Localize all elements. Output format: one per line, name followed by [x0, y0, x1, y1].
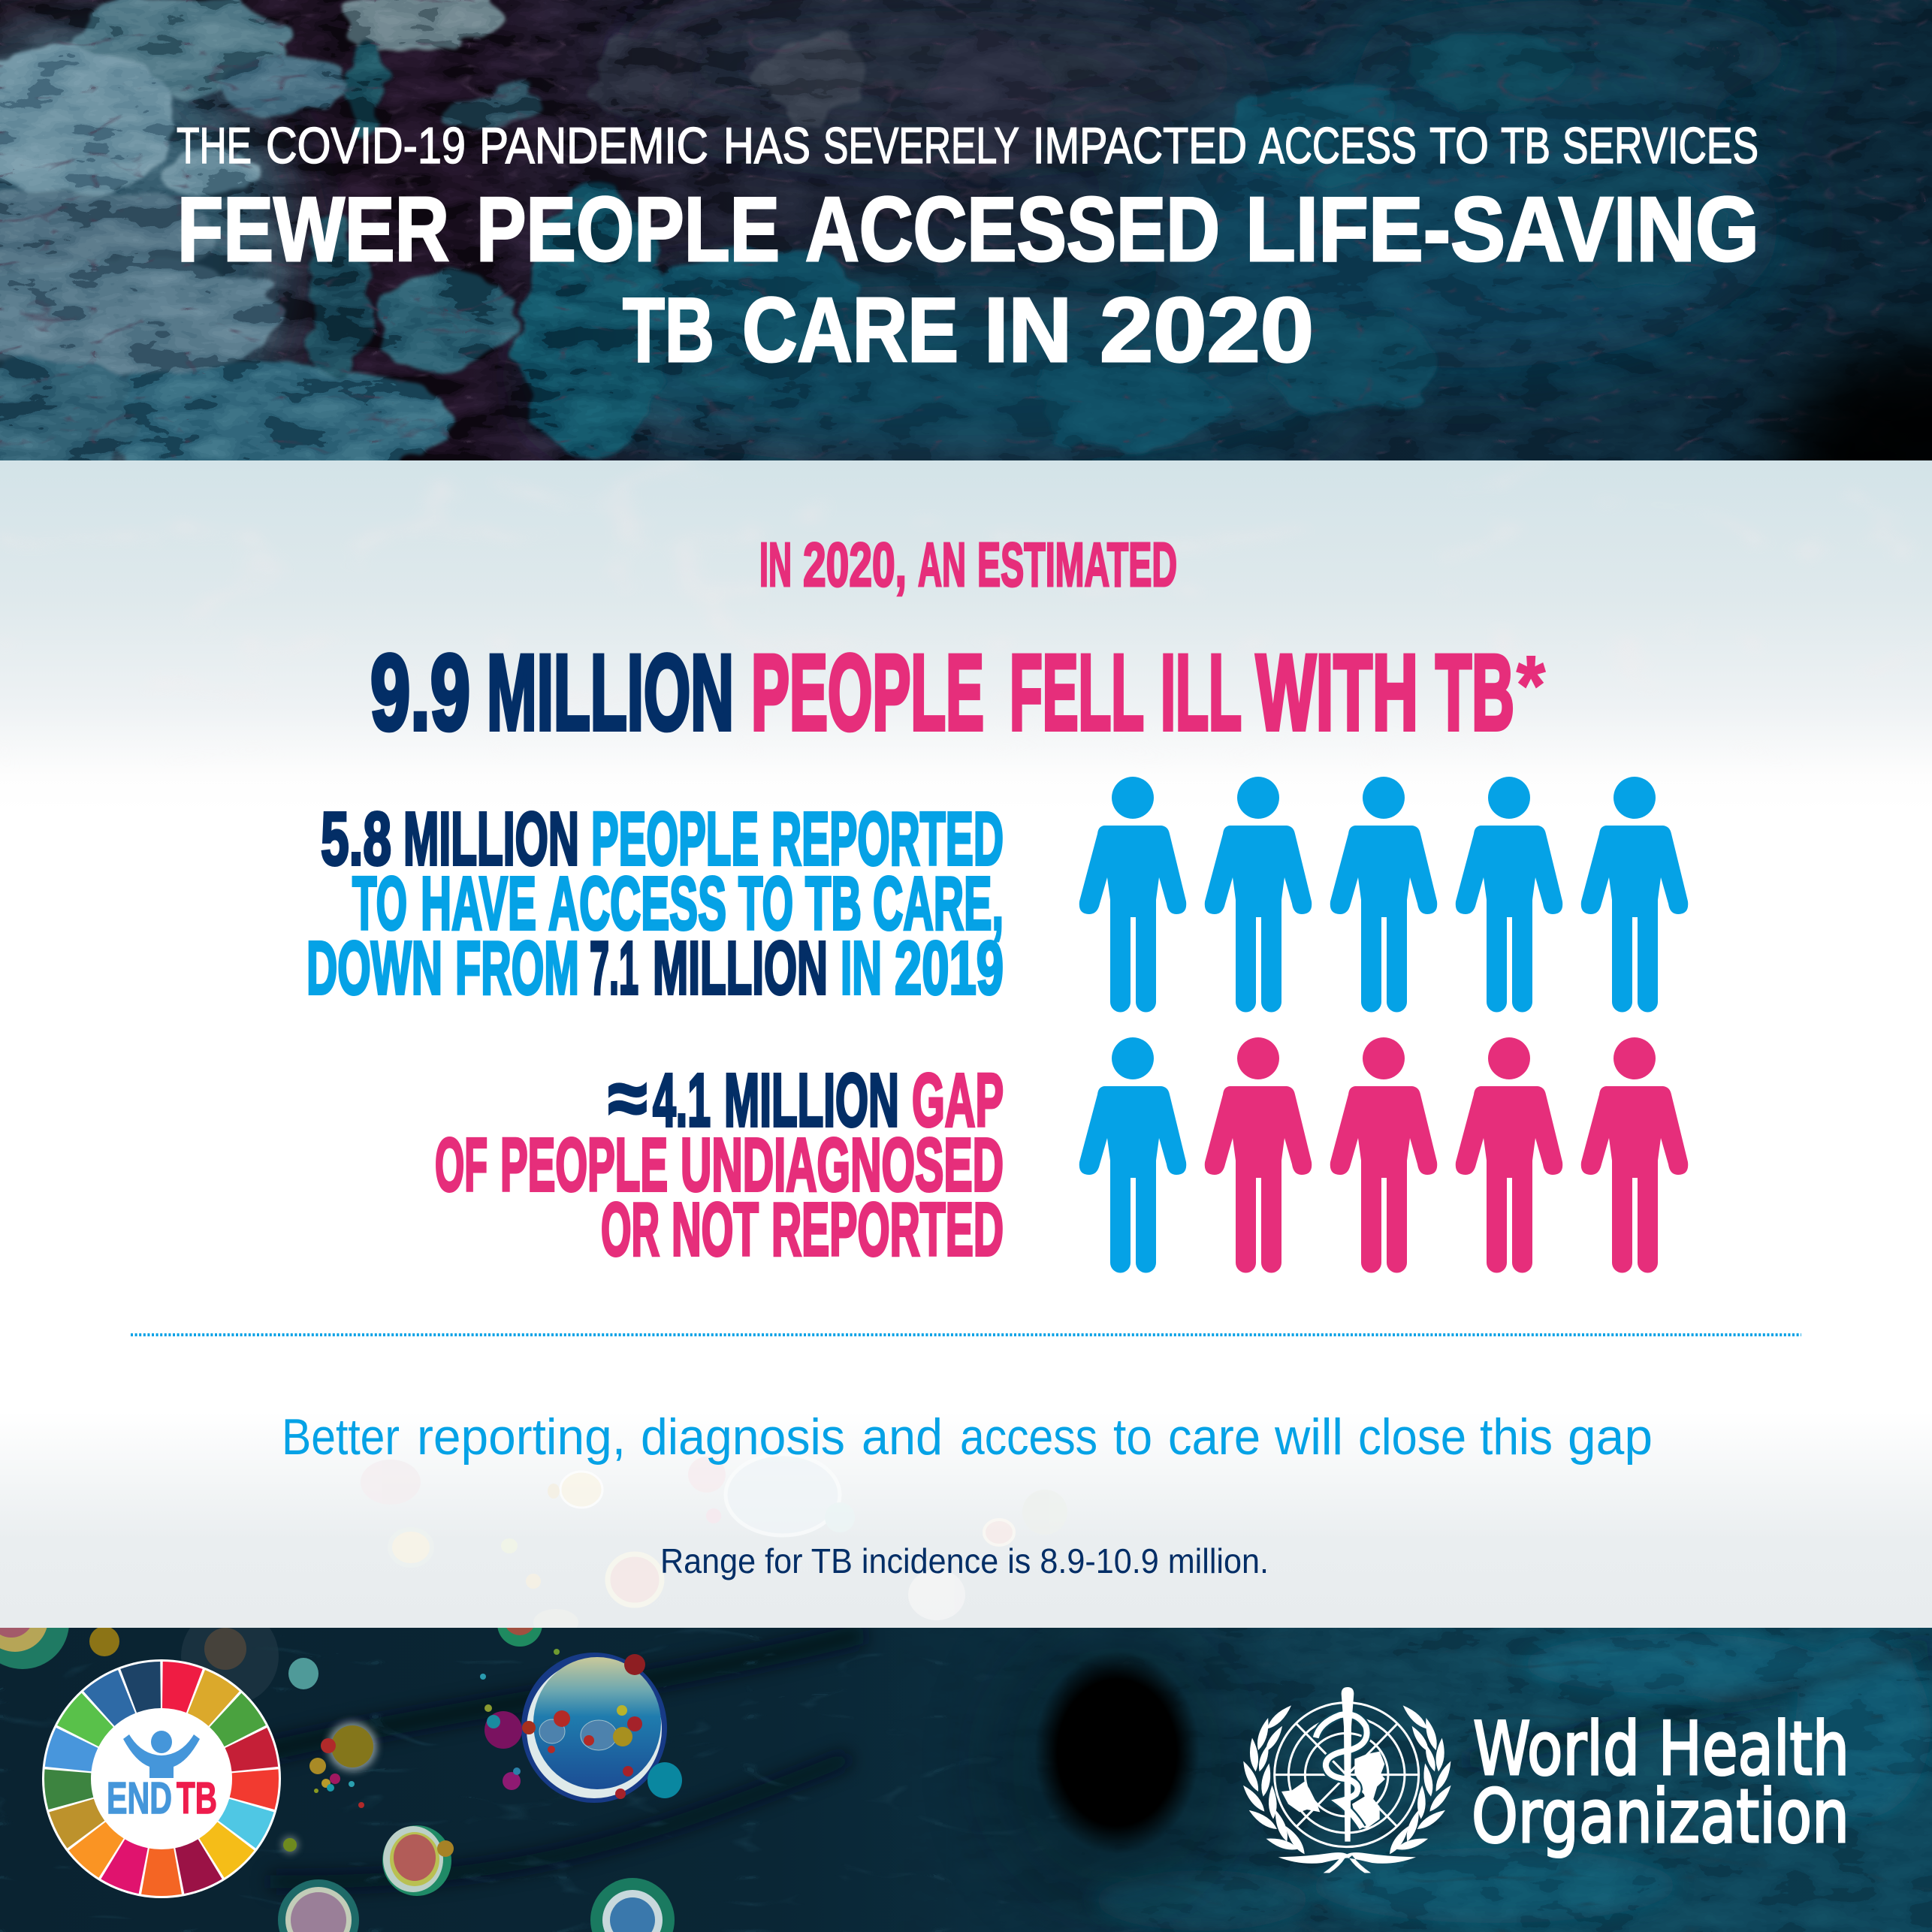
text: access statistic: ACCESS — [548, 862, 726, 946]
closing message: will — [1274, 1408, 1343, 1466]
text: access statistic: 7.1 — [590, 926, 638, 1010]
navy figure: 9.9 — [370, 633, 470, 753]
subtitle: COVID-19 — [266, 117, 466, 174]
END TB wordmark: TB — [177, 1774, 217, 1823]
headline line 2: IN — [984, 279, 1072, 381]
main statistic — [370, 633, 1545, 753]
headline line 2: CARE — [742, 279, 958, 381]
WHO wordmark: Organization — [1472, 1774, 1849, 1860]
text: access statistic: 2019 — [895, 926, 1004, 1010]
text: gap statistic: OF — [435, 1123, 488, 1207]
icons: bottom row of five people — [1079, 1037, 1688, 1272]
intro heading: IN — [759, 530, 792, 599]
text: access statistic: PEOPLE — [591, 797, 759, 881]
subtitle: HAS — [723, 117, 811, 174]
text: access statistic — [306, 797, 1004, 1010]
headline line 1: PEOPLE — [476, 178, 780, 280]
icon: End TB logo — [42, 1659, 281, 1898]
navy figure: MILLION — [487, 633, 734, 753]
headline line 2: TB — [623, 279, 714, 381]
closing message: and — [862, 1408, 943, 1466]
title block — [177, 117, 1759, 381]
closing message — [282, 1408, 1653, 1466]
WHO wordmark — [1472, 1707, 1849, 1860]
text: gap statistic: OR — [601, 1188, 660, 1272]
intro heading: ESTIMATED — [977, 530, 1177, 599]
panel: top header background — [0, 0, 1932, 460]
subtitle: SEVERELY — [823, 117, 1019, 174]
text: access statistic: 5.8 — [321, 797, 391, 881]
text: gap statistic: 4.1 — [653, 1058, 711, 1143]
subtitle — [177, 117, 1758, 174]
pink statement — [751, 633, 1545, 753]
closing message: Better — [282, 1408, 400, 1466]
closing message: to — [1113, 1408, 1152, 1466]
subtitle: IMPACTED — [1033, 117, 1247, 174]
headline line 2 — [623, 279, 1314, 381]
text: gap statistic: NOT — [672, 1188, 759, 1272]
headline line 1 — [177, 178, 1759, 280]
text: access statistic: FROM — [455, 926, 579, 1010]
icons: top row of five people — [1079, 777, 1688, 1013]
closing message: gap — [1568, 1408, 1653, 1466]
text: access statistic: TB — [805, 862, 862, 946]
text: access statistic: MILLION — [653, 926, 828, 1010]
subtitle: TO — [1429, 117, 1489, 174]
headline line 1: ACCESSED — [805, 178, 1220, 280]
text: gap statistic: ≈ — [608, 1056, 647, 1140]
END TB wordmark: END — [107, 1774, 172, 1823]
text: access statistic: REPORTED — [771, 797, 1004, 881]
text: access statistic: TO — [738, 862, 793, 946]
text: access statistic: CARE, — [873, 862, 1004, 946]
text: access statistic: HAVE — [421, 862, 536, 946]
pink statement: TB — [1435, 633, 1514, 753]
closing message: reporting, — [417, 1408, 626, 1466]
panel: bottom footer background — [0, 1623, 1932, 1932]
headline line 1: FEWER — [177, 178, 449, 280]
intro heading — [759, 530, 1177, 599]
headline line 1: LIFE-SAVING — [1245, 178, 1759, 280]
closing message: this — [1480, 1408, 1553, 1466]
text: gap statistic: MILLION — [724, 1058, 899, 1143]
panel: white centre background — [0, 460, 1932, 1636]
footer bubbles — [0, 1628, 682, 1932]
subtitle: PANDEMIC — [479, 117, 708, 174]
headline line 2: 2020 — [1100, 279, 1314, 381]
subtitle: ACCESS — [1259, 117, 1417, 174]
text: access statistic: IN — [841, 926, 882, 1010]
text: gap statistic: PEOPLE — [500, 1123, 668, 1207]
icon: raised-arms figure — [123, 1731, 200, 1778]
pink statement: * — [1517, 639, 1545, 732]
footnote: Range for TB incidence is 8.9-10.9 million. — [660, 1541, 1269, 1580]
subtitle: THE — [177, 117, 252, 174]
text: access statistic: TO — [352, 862, 407, 946]
icon: WHO emblem — [1239, 1687, 1454, 1873]
closing message: care — [1168, 1408, 1260, 1466]
closing message: access — [960, 1408, 1097, 1466]
subtitle: TB — [1501, 117, 1550, 174]
text: gap statistic — [435, 1056, 1004, 1272]
text: gap statistic: GAP — [912, 1058, 1004, 1143]
navy figure — [370, 633, 734, 753]
text: gap statistic: UNDIAGNOSED — [681, 1123, 1004, 1207]
text: gap statistic: REPORTED — [771, 1188, 1004, 1272]
text: access statistic: DOWN — [306, 926, 442, 1010]
subtitle: SERVICES — [1562, 117, 1758, 174]
text: access statistic: MILLION — [403, 797, 579, 881]
pink statement: FELL — [1010, 633, 1144, 753]
intro heading: 2020, — [803, 530, 907, 599]
pink statement: WITH — [1256, 633, 1418, 753]
intro heading: AN — [918, 530, 966, 599]
closing message: diagnosis — [641, 1408, 845, 1466]
closing message: close — [1358, 1408, 1466, 1466]
pink statement: ILL — [1161, 633, 1242, 753]
pink statement: PEOPLE — [751, 633, 984, 753]
